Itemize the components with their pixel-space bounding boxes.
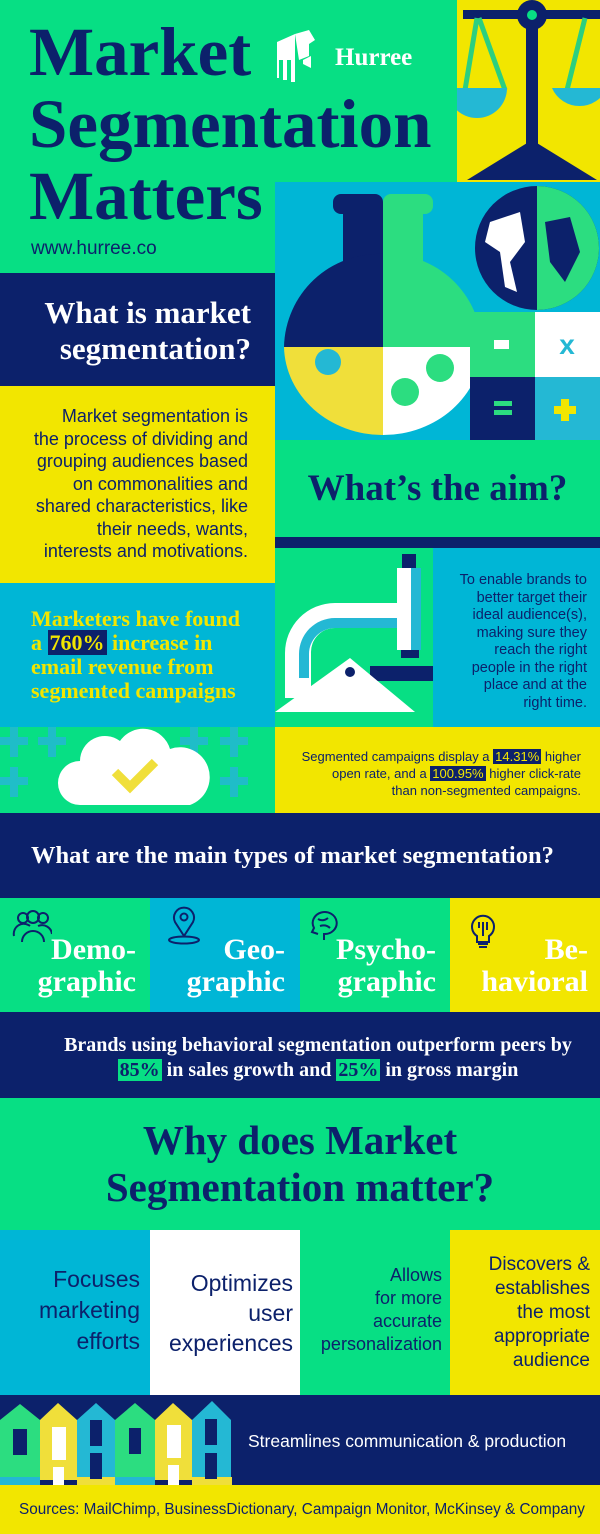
title: Matters bbox=[29, 158, 263, 234]
text: definition: the process of dividing and bbox=[34, 428, 248, 448]
tile: behavioral: Be- bbox=[545, 933, 588, 966]
heading: what's the aim: What’s the aim? bbox=[308, 468, 567, 509]
benefit: discovers: establishes bbox=[495, 1278, 590, 1299]
text: definition bbox=[0, 386, 275, 583]
benefit: discovers bbox=[450, 1230, 600, 1395]
stat: 760%: email revenue from bbox=[31, 654, 213, 679]
title: Segmentation bbox=[29, 86, 431, 162]
tile: demographic: graphic bbox=[38, 965, 136, 998]
text: streamlines: Streamlines communication & production bbox=[248, 1431, 566, 1451]
text: aim: To enable brands to bbox=[460, 572, 587, 588]
tile: psychographic bbox=[300, 898, 450, 1012]
text: definition: their needs, wants, bbox=[97, 518, 248, 538]
title: Market bbox=[29, 14, 251, 90]
tile: behavioral: havioral bbox=[481, 965, 588, 998]
stat: 760%: Marketers have found bbox=[31, 606, 240, 631]
benefit: optimizes: Optimizes bbox=[191, 1270, 293, 1296]
benefit: focuses bbox=[0, 1230, 150, 1395]
icon: microscope bbox=[275, 548, 433, 727]
tile: psychographic: Psycho- bbox=[336, 933, 436, 966]
icon: globe bbox=[475, 186, 599, 310]
benefit: optimizes: experiences bbox=[169, 1330, 293, 1356]
url: www.hurree.co bbox=[31, 238, 157, 259]
title bbox=[29, 14, 431, 234]
panel: types bbox=[12, 898, 600, 1012]
icon: scales bbox=[457, 0, 600, 182]
text: aim: people in the right bbox=[472, 660, 587, 676]
benefit: personalization: Allows bbox=[390, 1265, 442, 1285]
heading: what's the aim bbox=[275, 440, 600, 537]
panel: benefits bbox=[0, 1230, 600, 1395]
text: definition: Market segmentation is bbox=[62, 406, 248, 426]
text: aim: better target their bbox=[477, 590, 587, 606]
text: definition: grouping audiences based bbox=[37, 451, 248, 471]
benefit: personalization: personalization bbox=[321, 1334, 442, 1354]
heading: main types: What are the main types of market segmentation? bbox=[31, 842, 554, 869]
benefit: discovers: audience bbox=[513, 1350, 590, 1371]
panel: flask illustration: x bbox=[559, 329, 575, 360]
stat: open rate: open rate, and a 100.95% higher click-rate bbox=[332, 766, 581, 781]
benefit: personalization: for more bbox=[375, 1288, 442, 1308]
stat: open rate: than non-segmented campaigns. bbox=[392, 783, 581, 798]
sources: Sources: MailChimp, BusinessDictionary, Campaign Monitor, McKinsey & Company bbox=[19, 1501, 585, 1518]
text: aim: reach the right bbox=[494, 642, 587, 658]
logo: Hurree bbox=[335, 44, 412, 71]
stat: behavioral segmentation bbox=[0, 1012, 600, 1098]
stat: behavioral segmentation: 85% in sales growth and 25% in gross margin bbox=[120, 1059, 518, 1081]
logo bbox=[277, 30, 412, 82]
stat: behavioral segmentation: Brands using behavioral segmentation outperform peers by bbox=[64, 1034, 572, 1056]
panel: streamlines bbox=[0, 1395, 600, 1485]
tile: geographic: graphic bbox=[187, 965, 285, 998]
stat: open rate bbox=[275, 727, 600, 813]
text: definition: on commonalities and bbox=[73, 474, 248, 494]
text: definition: shared characteristics, like bbox=[36, 496, 248, 516]
benefit: discovers: Discovers & bbox=[489, 1254, 590, 1275]
icon: cloud with check bbox=[0, 727, 275, 813]
benefit: personalization bbox=[300, 1230, 450, 1395]
benefit: discovers: the most bbox=[517, 1302, 590, 1323]
tile: demographic bbox=[0, 898, 150, 1012]
text: aim: right time. bbox=[523, 694, 587, 710]
heading: main types bbox=[0, 813, 600, 898]
stat: open rate: Segmented campaigns display a 14.31% higher bbox=[302, 749, 581, 764]
panel: flask illustration bbox=[275, 182, 600, 440]
heading: what is market segmentation bbox=[0, 273, 275, 386]
tile: demographic: Demo- bbox=[51, 933, 136, 966]
tile: geographic: Geo- bbox=[223, 933, 285, 966]
heading: what is market segmentation: segmentation? bbox=[60, 331, 251, 366]
benefit: focuses: Focuses bbox=[53, 1266, 140, 1292]
benefit: optimizes: user bbox=[248, 1300, 293, 1326]
header panel bbox=[0, 0, 457, 275]
text: definition: interests and motivations. bbox=[44, 541, 248, 561]
stat: 760%: segmented campaigns bbox=[31, 678, 236, 703]
heading: what is market segmentation: What is market bbox=[44, 295, 251, 330]
stat: 760% bbox=[0, 583, 275, 727]
tile: geographic bbox=[150, 898, 300, 1012]
text: aim: place and at the bbox=[484, 677, 587, 693]
benefit: discovers: appropriate bbox=[494, 1326, 590, 1347]
benefit: personalization: accurate bbox=[373, 1311, 442, 1331]
benefit: optimizes bbox=[150, 1230, 300, 1395]
text: aim: ideal audience(s), bbox=[473, 607, 587, 623]
tile: psychographic: graphic bbox=[338, 965, 436, 998]
stat: 760%: a 760% increase in bbox=[31, 630, 212, 655]
benefit: focuses: efforts bbox=[76, 1328, 140, 1354]
heading: why does it matter bbox=[0, 1098, 600, 1230]
heading: why does it matter: Why does Market bbox=[143, 1117, 457, 1163]
icon: houses bbox=[0, 1401, 232, 1485]
text: aim: making sure they bbox=[477, 624, 587, 640]
benefit: focuses: marketing bbox=[39, 1297, 140, 1323]
text: aim bbox=[433, 548, 600, 727]
sources bbox=[0, 1485, 600, 1534]
tile: behavioral bbox=[450, 898, 600, 1012]
heading: why does it matter: Segmentation matter? bbox=[106, 1164, 494, 1210]
